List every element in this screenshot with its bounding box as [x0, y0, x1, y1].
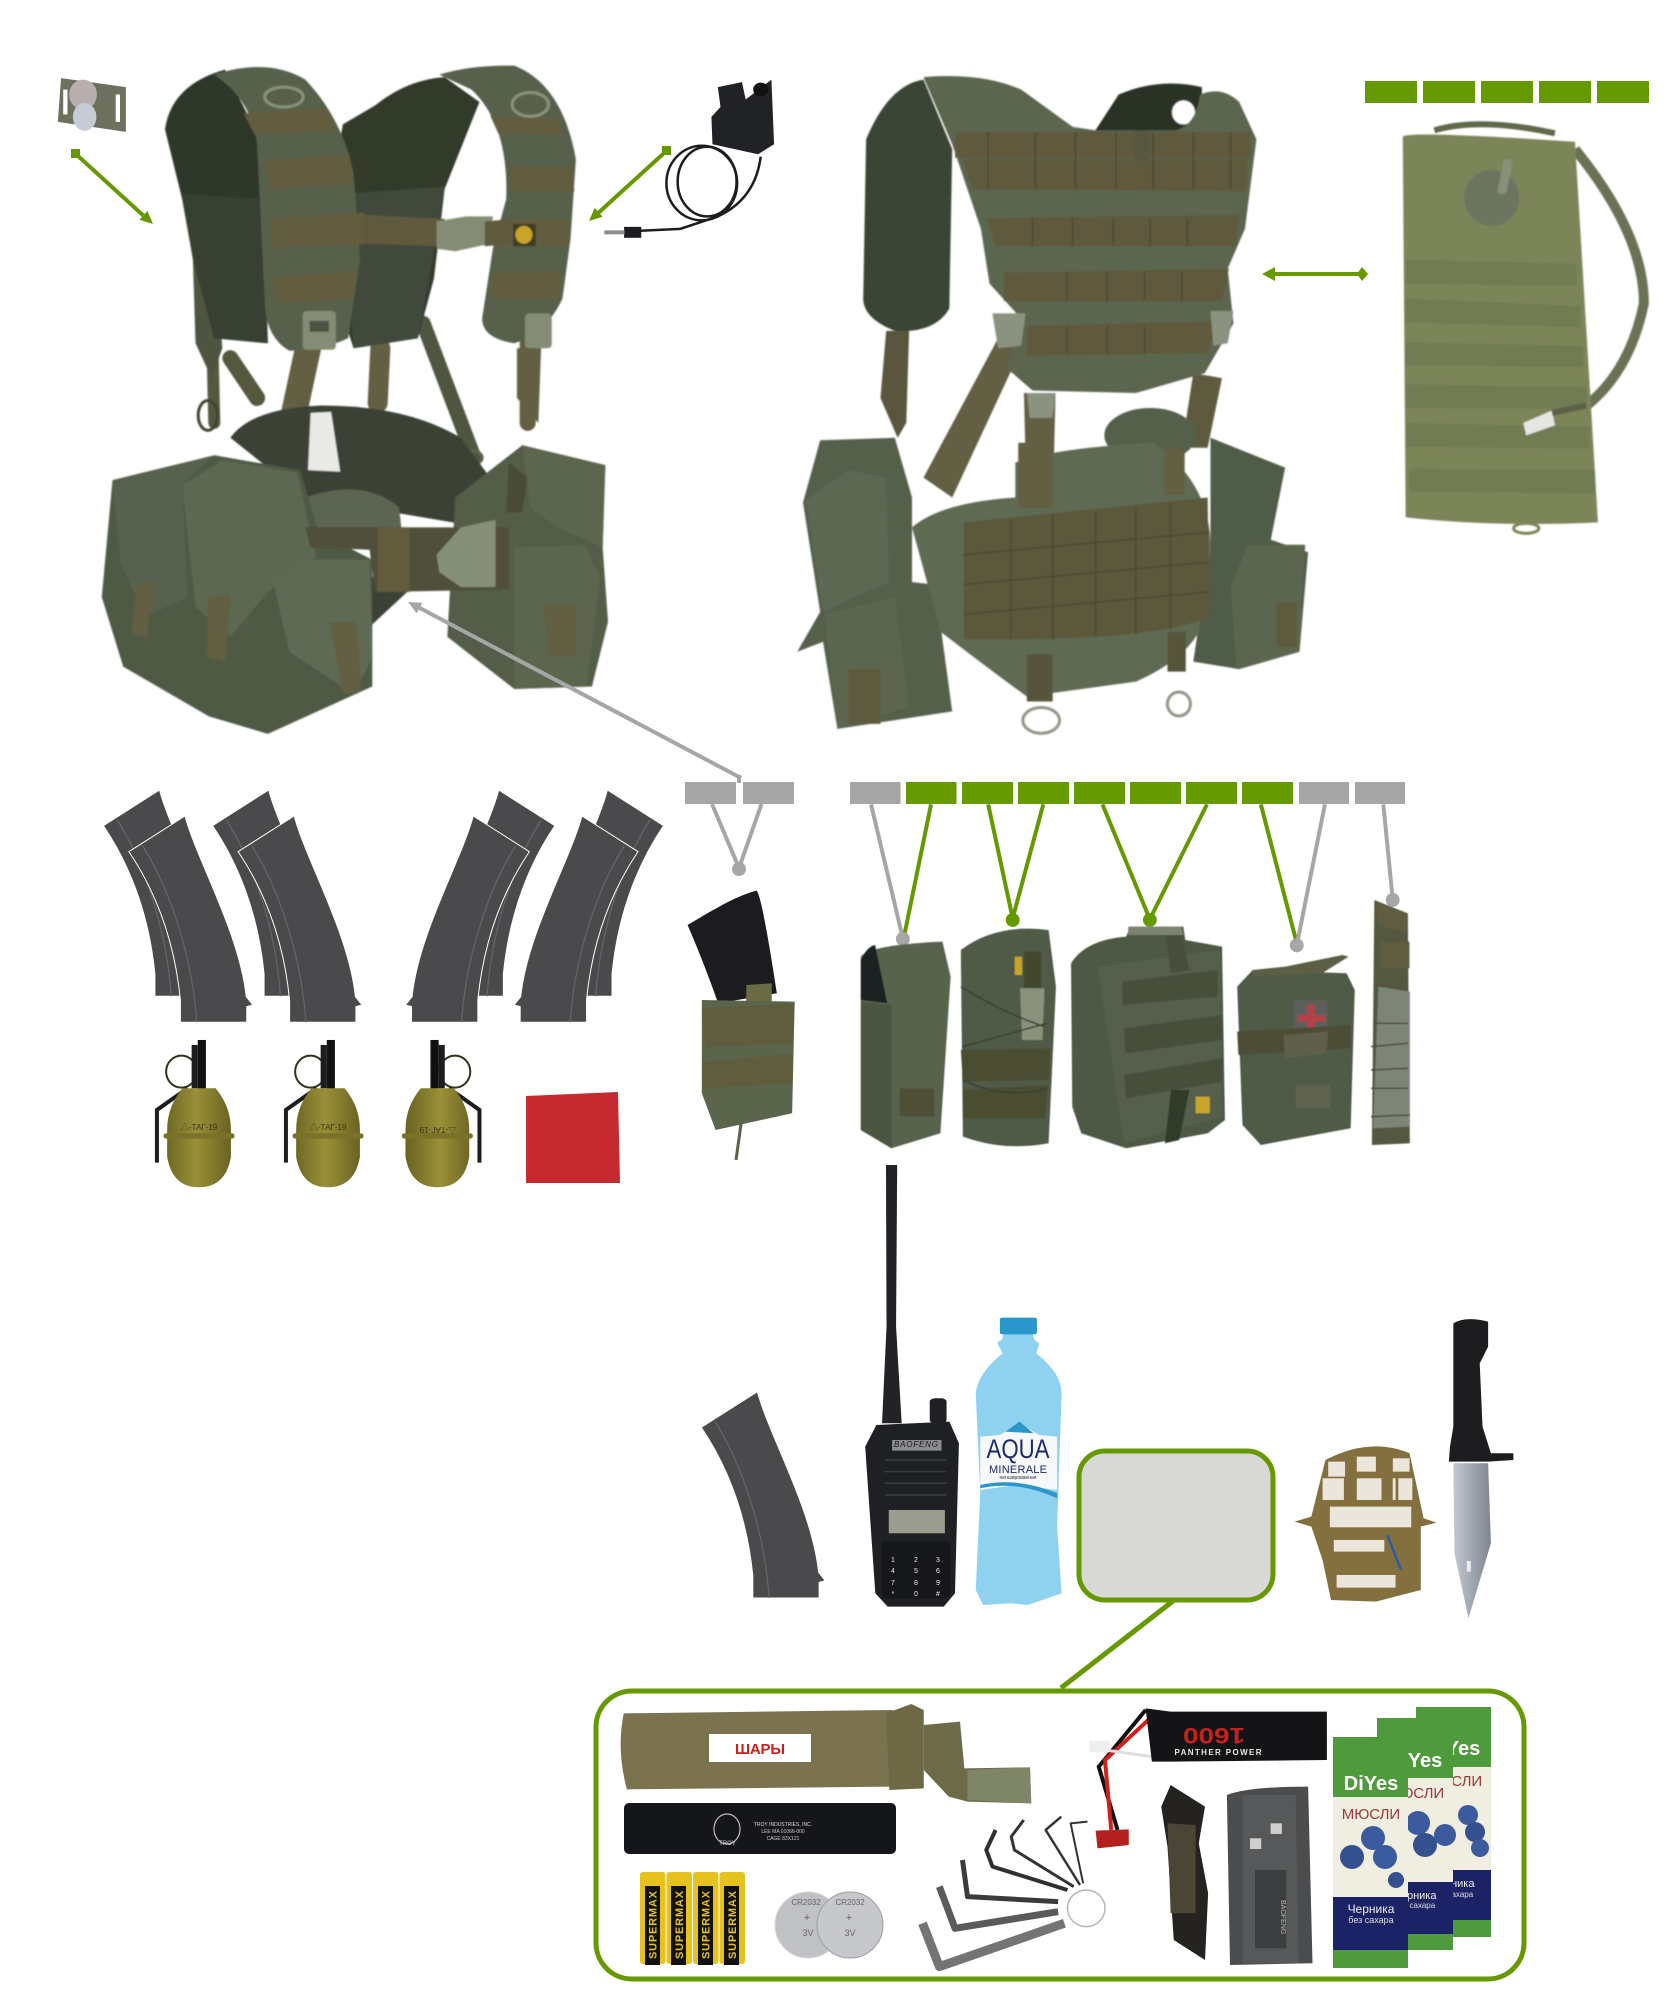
grenade 2: △-ТАГ-19 [310, 1122, 347, 1132]
coin cell batteries: 3V [802, 1928, 814, 1938]
muesli bar back [1416, 1707, 1491, 1937]
radio spare battery [1227, 1787, 1312, 1965]
silencer cylinder [624, 1803, 896, 1854]
water bottle: Aqua Minerale: AQUA [986, 1434, 1050, 1464]
pouch: large utility MOLLE [1071, 927, 1225, 1148]
magazine pouch with magazine [688, 891, 795, 1160]
radio: Baofeng handheld: 6 [936, 1568, 940, 1575]
water bottle: Aqua Minerale [976, 1318, 1062, 1605]
hydration pack with drinking tube [1403, 124, 1644, 533]
red cloth [526, 1092, 620, 1183]
coin cell batteries: + [804, 1912, 810, 1924]
muesli bar front: без сахара [1348, 1915, 1394, 1925]
folding knife [1161, 1785, 1208, 1960]
grey placeholder card [1079, 1451, 1273, 1600]
radio: Baofeng handheld: # [936, 1591, 940, 1598]
panel: kit contents [596, 1691, 1524, 1979]
radio spare battery: BAOFENG [1279, 1900, 1286, 1934]
grenade 1 [157, 1040, 234, 1187]
grenade 3 [402, 1040, 479, 1187]
coin cell batteries [775, 1892, 883, 1958]
harness rear view with MOLLE panel [797, 76, 1308, 733]
coin cell batteries: 3V [844, 1928, 856, 1938]
arrow: strobe to harness [71, 149, 153, 224]
silencer cylinder: CAGE 83X121 [767, 1836, 800, 1842]
connector lines to pouches [871, 804, 1400, 952]
icon: PTT headset switch with cable [604, 80, 774, 238]
hex key set [922, 1817, 1105, 1967]
radio: Baofeng handheld: BAOFENG [894, 1440, 938, 1449]
muesli bar back: без сахара [1433, 1890, 1474, 1899]
muesli bar front: Черника [1348, 1902, 1395, 1916]
muesli bar back: МЮСЛИ [1424, 1773, 1482, 1790]
water bottle: Aqua Minerale: негазированная [999, 1475, 1037, 1481]
grey label bars with connector to magazine pouch [685, 782, 794, 876]
grenade 3: △-ТАГ-19 [419, 1125, 456, 1135]
AAA batteries: SUPERMAX [701, 1890, 713, 1959]
silencer cylinder: LEE MA 01066-000 [761, 1829, 805, 1835]
grenade 2 [286, 1040, 363, 1187]
muesli bar front [1333, 1737, 1408, 1968]
pouch: magazine with flap [861, 942, 951, 1148]
muesli bar back: DiYes [1426, 1738, 1480, 1760]
magazine single [701, 1392, 825, 1598]
radio: Baofeng handheld: 3 [936, 1557, 940, 1564]
grenade 1: △-ТАГ-19 [180, 1122, 218, 1132]
LiPo battery with wires [1089, 1708, 1327, 1848]
label bars above hydration pack [1365, 81, 1649, 103]
coin cell batteries: + [846, 1912, 852, 1924]
pouch: slim side tube [1371, 900, 1410, 1145]
coin cell batteries: CR2032 [791, 1898, 821, 1907]
muesli bar middle: МЮСЛИ [1386, 1785, 1444, 1802]
label bars for pouches [850, 782, 1405, 804]
connector: card to kit panel [1061, 1601, 1173, 1688]
LiPo battery with wires: PANTHER POWER [1174, 1748, 1262, 1757]
coin cell batteries: CR2032 [835, 1898, 865, 1907]
arrow: switch to harness [589, 146, 671, 221]
muesli bar front: МЮСЛИ [1342, 1806, 1400, 1823]
muesli bar middle: Черника [1394, 1890, 1437, 1902]
AAA batteries: SUPERMAX [727, 1890, 739, 1959]
AAA batteries: SUPERMAX [648, 1890, 660, 1959]
bayonet knife [1449, 1319, 1513, 1618]
icon: IR strobe marker [58, 78, 126, 132]
radio: Baofeng handheld: 7 [891, 1580, 895, 1587]
radio: Baofeng handheld: 9 [936, 1580, 940, 1587]
radio: Baofeng handheld: 1 [891, 1557, 895, 1564]
radio: Baofeng handheld: 0 [914, 1591, 918, 1598]
muesli bar middle [1377, 1718, 1456, 1950]
arrow: harness rear to hydration pack [1262, 267, 1368, 281]
AAA batteries: SUPERMAX [674, 1890, 686, 1959]
harness front view with pouches [102, 66, 608, 734]
radio: Baofeng handheld: 4 [891, 1568, 895, 1575]
first aid kit open [1295, 1446, 1436, 1602]
radio: Baofeng handheld: 8 [914, 1580, 918, 1587]
arrow: magazine pouch labels to belt [408, 602, 741, 783]
pouch: bottle with cords [961, 929, 1056, 1146]
muesli bar middle: DiYes [1388, 1750, 1442, 1772]
water bottle: Aqua Minerale: MINERALE [989, 1464, 1047, 1476]
radio: Baofeng handheld: * [892, 1591, 895, 1598]
tube with label: ШАРЫ [735, 1741, 785, 1758]
muesli bar middle: без сахара [1395, 1901, 1436, 1910]
muesli bar front: DiYes [1344, 1773, 1398, 1795]
muesli bar back: Черника [1432, 1878, 1475, 1890]
pouch: first aid kit [1237, 955, 1355, 1145]
AAA batteries [640, 1872, 745, 1965]
silencer cylinder: TROY INDUSTRIES, INC. [754, 1822, 812, 1828]
silencer cylinder: TROY [719, 1841, 736, 1847]
tube with label [621, 1704, 1031, 1803]
radio: Baofeng handheld: 5 [914, 1568, 918, 1575]
LiPo battery with wires: 1600 [1183, 1723, 1245, 1748]
radio: Baofeng handheld [865, 1165, 959, 1607]
magazines: four left pairs and right pairs [103, 790, 664, 1022]
radio: Baofeng handheld: 2 [914, 1557, 918, 1564]
